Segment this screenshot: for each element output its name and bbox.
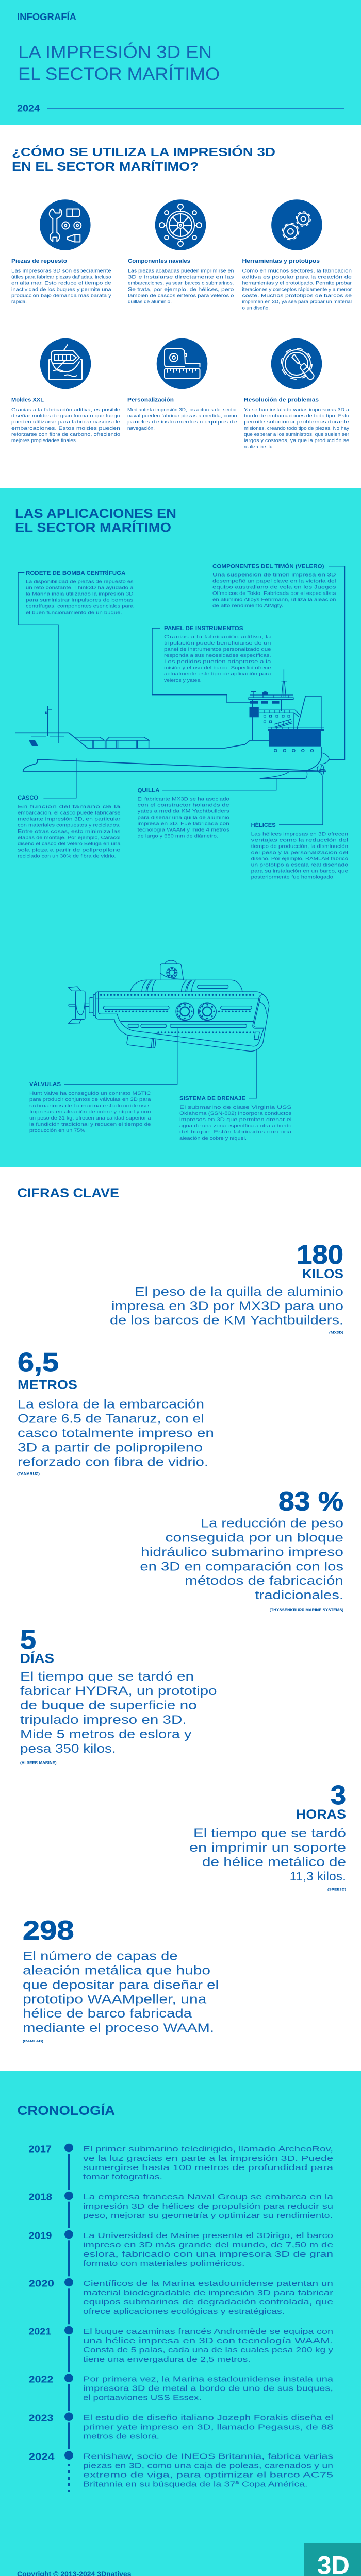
timeline entry 2020: equipos submarinos de degradación controlada, que <box>83 2298 333 2307</box>
callout: hull: CASCO <box>18 795 38 801</box>
text: XXL moulds: embarcaciones. Estos moldes pueden <box>11 426 120 431</box>
callout: keel: tecnología WAAM y mide 4 metros <box>137 827 229 833</box>
text: customisation <box>127 397 237 431</box>
stat: 6,5 metros: Ozare 6.5 de Tanaruz, con el <box>18 1412 204 1426</box>
callout: keel: impresa en 3D. Fue fabricada con <box>137 821 229 827</box>
text: spare parts: rápida. <box>11 299 27 304</box>
callout: keel: QUILLA <box>137 788 160 794</box>
callout: hull: En función del tamaño de la <box>18 804 121 809</box>
stat: 3 horas: HORAS <box>296 1807 346 1822</box>
stat: 5 días: Mide 5 metros de eslora y <box>20 1727 191 1741</box>
panel: timeline <box>0 2071 361 2576</box>
header kicker: INFOGRAFÍA <box>17 11 76 22</box>
stat: 6,5 metros: 6,5 <box>18 1348 59 1378</box>
panel: maritime applications <box>0 488 361 1167</box>
stat: 3 horas: de hélice metálico de <box>202 1855 346 1869</box>
text: customisation: Mediante la impresión 3D, los actores del sector <box>127 407 237 413</box>
callout: impeller: un reto constante. Think3D ha ayudado a <box>26 585 134 591</box>
stat: 83 %: hidráulico submarino impreso <box>141 1545 343 1559</box>
stat: 6,5 metros: casco totalmente impreso en <box>18 1427 214 1440</box>
callout: propellers: tiempo de producción, la disminución <box>251 843 348 849</box>
stat: 180 kilos: KILOS <box>302 1267 343 1281</box>
stat: 298 layers: aleación metálica que hubo <box>23 1963 210 1977</box>
text: naval components: 3D e instalarse directamente en las <box>128 274 234 280</box>
timeline entry 2019: 2019 <box>29 2231 52 2241</box>
text: problem solving: bordo de embarcaciones de todo tipo. Esto <box>244 413 349 419</box>
timeline entry 2021 <box>29 2326 334 2372</box>
callout: instrument panel: panel de instrumentos personalizado que <box>164 647 271 652</box>
text: problem solving <box>244 397 350 450</box>
callout: propellers <box>251 776 348 880</box>
text: XXL moulds <box>11 397 120 444</box>
callout: valves: un peso de 31 kg, ofrecen una calidad superior a <box>29 1115 151 1121</box>
section heading: CRONOLOGÍA <box>18 2103 115 2118</box>
callout: instrument panel: responda a sus necesidades específicas. <box>164 653 271 658</box>
stat: 298 layers: El número de capas de <box>23 1949 178 1963</box>
text: problem solving: que esperar a los suministros, que suelen ser <box>244 432 349 437</box>
text: tools and prototypes: imprimen en 3D, ya sea para probar un material <box>242 299 352 304</box>
timeline entry 2017: 2017 <box>29 2144 52 2155</box>
timeline entry 2018: La empresa francesa Naval Group se embarca en la <box>83 2193 334 2201</box>
text: naval components: embarcaciones, ya sean barcos o submarinos. <box>128 280 234 286</box>
callout: keel: de largo y 650 mm de diámetro. <box>137 834 218 839</box>
text: customisation: paneles de instrumentos o equipos de <box>127 419 237 425</box>
callout: propellers: un prototipo a escala real diseñado <box>251 862 348 868</box>
section heading <box>12 145 275 173</box>
callout: rudder components: Olímpicos de Tokio. Fabricada por el especialista <box>212 590 336 596</box>
callout: instrument panel: Gracias a la fabricación aditiva, la <box>164 634 272 640</box>
stat: 5 días: 5 <box>20 1625 36 1655</box>
stat: 5 días <box>20 1625 217 1765</box>
callout: propellers: ventajas como la reducción del <box>251 837 348 843</box>
timeline entry 2024 <box>29 2451 333 2492</box>
callout: keel: para diseñar una quilla de aluminio <box>137 815 229 821</box>
section heading: LAS APLICACIONES EN <box>15 506 176 521</box>
icon: spare parts tools <box>40 199 91 250</box>
timeline entry 2018: impresión 3D de hélices de propulsión para reducir su <box>83 2202 333 2211</box>
callout: instrument panel: actualmente este tipo de aplicación para <box>164 671 271 677</box>
year: 2024 <box>17 104 40 114</box>
stat: 5 días: pesa 350 kilos. <box>20 1742 116 1756</box>
callout: propellers: diseño. Por ejemplo, RAMLAB fabricó <box>251 856 348 861</box>
main title <box>18 43 220 84</box>
main title: EL SECTOR MARÍTIMO <box>18 64 220 84</box>
callout: drainage system: El submarino de clase Virginia USS <box>179 1105 292 1110</box>
callout: valves: Hunt Valve ha conseguido un contrato MSTIC <box>29 1091 151 1096</box>
callout: hull: etapas de montaje. Por ejemplo, Caracol <box>18 835 121 840</box>
text: problem solving: largos y costosos, ya que la producción se <box>244 438 349 444</box>
timeline entry 2017: sumergirse hasta 100 metros de profundidad para <box>83 2163 334 2172</box>
callout: instrument panel: veleros y yates. <box>164 677 202 683</box>
timeline entry 2024: Renishaw, socio de INEOS Britannia, fabrica varias <box>83 2452 333 2461</box>
timeline entry 2021: Consta de 5 palas, cada una de las cuales pesa 200 kg y <box>83 2346 334 2354</box>
stat: 298 layers: hélice de barco fabricada <box>23 2007 192 2021</box>
stat: 5 días: DÍAS <box>20 1651 54 1666</box>
icon: gears <box>271 199 322 250</box>
stat: 83 %: métodos de fabricación <box>185 1574 343 1588</box>
callout: hull: mediante impresión 3D, en particular <box>18 816 121 822</box>
section heading <box>15 506 176 535</box>
text: tools and prototypes: Como en muchos sectores, la fabricación <box>242 268 352 274</box>
stat: 180 kilos <box>110 1240 343 1334</box>
callout: propellers: Las hélices impresas en 3D ofrecen <box>251 831 348 837</box>
text: problem solving: misiones, creando todo tipo de piezas. No hay <box>244 426 349 431</box>
callout: drainage system: del buque. Están fabricados con una <box>179 1129 292 1135</box>
callout: impeller: la Marina india utilizando la impresión 3D <box>26 591 134 597</box>
stat: 180 kilos: de los barcos de KM Yachtbuilders. <box>110 1314 343 1328</box>
stat: 3 horas <box>189 1781 346 1892</box>
timeline entry 2018 <box>29 2192 334 2228</box>
text: problem solving: Resolución de problemas <box>244 397 319 403</box>
text: problem solving: permite solucionar problemas durante <box>244 419 349 425</box>
callout: keel: El fabricante MX3D se ha asociado <box>137 796 229 802</box>
timeline entry 2020: material biodegradable de impresión 3D para fabricar <box>83 2289 333 2297</box>
timeline entry 2023: 2023 <box>29 2413 54 2423</box>
timeline entry 2020: Científicos de la Marina estadounidense patentan un <box>83 2279 333 2288</box>
stat: 298 layers <box>23 1916 219 2043</box>
text: XXL moulds: Moldes XXL <box>11 397 44 403</box>
stat: 6,5 metros: reforzado con fibra de vidrio. <box>18 1455 208 1469</box>
stat: 6,5 metros: La eslora de la embarcación <box>18 1398 204 1412</box>
callout: instrument panel: Los pedidos pueden adaptarse a la <box>164 659 271 665</box>
timeline entry 2021: tiene una envergadura de 2,5 metros. <box>83 2355 251 2364</box>
icon: gear and screwdriver <box>271 338 322 389</box>
stat: 83 %: tradicionales. <box>255 1588 343 1602</box>
timeline entry 2024: 2024 <box>29 2451 55 2462</box>
callout: drainage system: aleación de cobre y níquel. <box>179 1136 247 1141</box>
stat: 83 %: 83 % <box>278 1487 343 1517</box>
stat: 5 días: tripulado impreso en 3D. <box>20 1713 187 1727</box>
timeline entry 2018: 2018 <box>29 2192 52 2202</box>
section heading: ¿CÓMO SE UTILIZA LA IMPRESIÓN 3D <box>12 145 275 159</box>
text: tools and prototypes: herramientas y el prototipado. Permite probar <box>242 280 352 286</box>
stat: 298 layers: 298 <box>23 1916 74 1945</box>
timeline entry 2020: ofrece aplicaciones ecológicas y estratégicas. <box>83 2307 285 2316</box>
callout: impeller: La disponibilidad de piezas de repuesto es <box>26 579 134 585</box>
timeline entry 2024: extremo de viga, para optimizar el barco AC75 <box>83 2470 333 2479</box>
callout: drainage system: impresos en 3D que permiten drenar el <box>179 1117 292 1123</box>
callout: valves: la fundición tradicional y reducen el tiempo de <box>29 1122 151 1127</box>
timeline entry 2022: el portaaviones USS Essex. <box>83 2393 202 2402</box>
stat: 3 horas: El tiempo que se tardó <box>193 1826 346 1840</box>
icon: boat mould blueprint <box>40 338 91 389</box>
callout: valves: Impresas en aleación de cobre y níquel y con <box>29 1109 151 1115</box>
text: tools and prototypes: coste. Muchos prototipos de barcos se <box>242 293 352 298</box>
callout: drainage system: agua de una zona específica a otra a bordo <box>179 1123 292 1129</box>
stat: 3 horas: en imprimir un soporte <box>189 1841 346 1855</box>
callout: propellers: del peso y la personalización del <box>251 850 348 855</box>
text: customisation: navegación. <box>127 426 155 431</box>
callout: propellers: posteriormente fue homologado. <box>251 874 335 880</box>
callout: keel: yates a medida KM Yachtbuilders <box>137 809 229 815</box>
timeline entry 2018: peso, mejorar su geometría y optimizar su rendimiento. <box>83 2211 333 2220</box>
stat: 298 layers: prototipo WAAMpeller, una <box>23 1993 207 2006</box>
text: XXL moulds: diseñar moldes de gran formato que luego <box>11 413 120 419</box>
timeline entry 2023: metros de eslora. <box>83 2432 159 2441</box>
callout: valves: submarinos de la marina estadounidense. <box>29 1103 151 1109</box>
callout: keel <box>137 778 276 839</box>
text: naval components: también de cascos enteros para veleros o <box>128 293 234 298</box>
panel: key figures <box>0 1167 361 2071</box>
stat: 180 kilos: (MX3D) <box>329 1331 343 1334</box>
text: tools and prototypes: iteraciones y conceptos rápidamente y a menor <box>242 286 352 292</box>
text: spare parts: producción bajo demanda más barata y <box>11 293 111 298</box>
timeline entry 2021: El buque cazaminas francés Andromède se equipa con <box>83 2327 333 2336</box>
callout: impeller: para suministrar impulsores de bombas <box>26 598 134 603</box>
callout: rudder components: de alto rendimiento AlMgty. <box>212 603 283 608</box>
callout: hull: embarcación, el casco puede fabricarse <box>18 810 121 816</box>
stat: 83 %: conseguida por un bloque <box>165 1531 343 1545</box>
callout: drainage system: SISTEMA DE DRENAJE <box>179 1095 245 1101</box>
stat: 5 días: El tiempo que se tardó en <box>20 1670 194 1684</box>
text: spare parts: en alta mar. Esto reduce el tiempo de <box>11 280 111 286</box>
panel: header <box>0 0 361 125</box>
text: spare parts: Las impresoras 3D son especialmente <box>11 268 111 274</box>
callout: rudder components: desempeñó un papel clave en la victoria del <box>212 578 336 584</box>
stat: 83 %: en 3D en comparación con los <box>140 1560 343 1573</box>
stat: 180 kilos: El peso de la quilla de aluminio <box>135 1285 343 1299</box>
timeline entry 2022: 2022 <box>29 2375 54 2385</box>
timeline entry 2023 <box>29 2412 333 2449</box>
callout: keel: con el constructor holandés de <box>137 803 229 808</box>
logo: 3Dnatives <box>304 2543 361 2576</box>
stat: 3 horas: (SPEE3D) <box>327 1889 346 1892</box>
timeline entry 2017: tomar fotografías. <box>83 2173 162 2181</box>
callout: rudder components: Una suspensión de timón impresa en 3D <box>212 572 336 578</box>
text: spare parts: Piezas de repuesto <box>11 258 67 264</box>
stat: 5 días: (AI SEER MARINE) <box>20 1762 57 1765</box>
text: spare parts: inactividad de los buques y permite una <box>11 286 111 292</box>
callout: propellers: HÉLICES <box>251 822 276 828</box>
callout: drainage system <box>179 1049 292 1141</box>
callout: instrument panel <box>152 625 272 703</box>
icon: ship helm <box>155 199 206 250</box>
timeline entry 2023: primer yate impreso en 3D, llamado Pegasus, de 88 <box>83 2422 333 2431</box>
timeline entry 2017: El primer submarino teledirigido, llamado ArcheoRov, <box>83 2145 333 2154</box>
timeline entry 2019: eslora, fabricado con una impresora 3D de gran <box>83 2250 333 2259</box>
stat: 83 % <box>140 1487 343 1612</box>
timeline entry 2022 <box>29 2374 334 2411</box>
main title: LA IMPRESIÓN 3D EN <box>18 43 212 62</box>
callout: instrument panel: tripulación puede beneficiarse de un <box>164 640 271 646</box>
text: naval components: quillas de aluminio. <box>128 299 172 304</box>
stat: 5 días: fabricar HYDRA, un prototipo <box>20 1684 217 1698</box>
section heading: EL SECTOR MARÍTIMO <box>15 520 171 535</box>
text: customisation: naval pueden fabricar piezas a medida, como <box>127 413 237 419</box>
callout: hull: sola pieza a partir de polipropileno <box>18 847 121 853</box>
timeline entry 2023: El estudio de diseño italiano Jozeph Forakis diseña el <box>83 2413 333 2422</box>
timeline entry 2021: 2021 <box>29 2327 51 2337</box>
callout: impeller <box>18 570 134 743</box>
stat: 6,5 metros: (TANARUZ) <box>17 1473 40 1476</box>
text: problem solving: realiza in situ. <box>244 444 274 450</box>
stat: 6,5 metros <box>17 1348 214 1476</box>
callout: valves <box>29 1028 177 1133</box>
text: XXL moulds: mejores propiedades finales. <box>11 438 77 444</box>
text: tools and prototypes: aditiva es popular para la creación de <box>242 274 352 280</box>
timeline entry 2022: Por primera vez, la Marina estadounidense instala una <box>83 2375 334 2383</box>
callout: hull: Entre otras cosas, esto minimiza las <box>18 828 121 834</box>
timeline entry 2017 <box>29 2144 334 2190</box>
timeline entry 2017: ve la luz gracias en parte a la impresión 3D. Puede <box>83 2154 333 2163</box>
callout: propellers: para su instalación en un barco, que <box>251 868 348 874</box>
callout: hull: reciclado con un 30% de fibra de vidrio. <box>18 853 116 859</box>
stat: 180 kilos: 180 <box>297 1240 343 1270</box>
callout: hull <box>18 758 121 859</box>
stat: 298 layers: mediante el proceso WAAM. <box>23 2021 214 2035</box>
callout: rudder components: equipo australiano de vela en los Juegos <box>212 584 336 590</box>
stat: 298 layers: (RAMLAB) <box>23 2040 43 2043</box>
callout: instrument panel: PANEL DE INSTRUMENTOS <box>164 625 243 632</box>
stat: 5 días: de buque de superficie no <box>20 1699 197 1713</box>
timeline entry 2019 <box>29 2230 333 2276</box>
timeline entry 2024: Britannia en su búsqueda de la 37ª Copa América. <box>83 2480 307 2488</box>
callout: rudder components: en aluminio Alloys Fehrmann, utiliza la aleación <box>212 597 336 602</box>
section heading: CIFRAS CLAVE <box>18 1186 119 1200</box>
text: problem solving: Ya se han instalado varias impresoras 3D a <box>244 407 350 413</box>
text: tools and prototypes <box>242 258 352 311</box>
callout: rudder components: COMPONENTES DEL TIMÓN (VELERO) <box>212 563 324 570</box>
callout: drainage system: Oklahoma (SSN-802) incorpora conductos <box>179 1111 292 1116</box>
text: XXL moulds: reforzarse con fibra de carbono, ofreciendo <box>11 432 120 437</box>
text: spare parts <box>11 258 111 304</box>
text: naval components <box>128 258 234 304</box>
timeline entry 2024: piezas en 3D, como una caja de poleas, carenados y un <box>83 2461 333 2470</box>
text: tools and prototypes: Herramientas y prototipos <box>242 258 320 264</box>
text: tools and prototypes: o un diseño. <box>242 305 270 311</box>
callout: valves: producción en un 75%. <box>29 1128 87 1133</box>
timeline entry 2019: impreso en 3D más grande del mundo, de 7,50 m de <box>83 2241 333 2249</box>
callout: rudder components <box>212 563 344 759</box>
icon: measuring tape and ruler <box>157 338 207 389</box>
text: XXL moulds: pueden utilizarse para fabricar cascos de <box>11 419 120 425</box>
text: naval components: Se trata, por ejemplo, de hélices, pero <box>128 286 234 292</box>
callout: impeller: centrífugas, componentes esenciales para <box>26 604 134 609</box>
panel: uses of 3D printing <box>0 125 361 488</box>
callout: valves: para producir conjuntos de válvulas en 3D para <box>29 1097 151 1103</box>
stat: 83 %: (THYSSENKRUPP MARINE SYSTEMS) <box>270 1609 343 1612</box>
timeline entry 2019: formato con materiales poliméricos. <box>83 2259 244 2268</box>
callout: valves: VÁLVULAS <box>29 1081 61 1088</box>
diagram: cargo ship <box>15 669 329 778</box>
text: naval components: Componentes navales <box>128 258 190 264</box>
stat: 83 %: La reducción de peso <box>201 1516 343 1530</box>
text: spare parts: útiles para fabricar piezas dañadas, incluso <box>11 274 111 280</box>
stat: 180 kilos: impresa en 3D por MX3D para uno <box>111 1299 343 1313</box>
text: customisation: Personalización <box>127 397 174 403</box>
stat: 6,5 metros: 3D a partir de polipropileno <box>18 1441 203 1455</box>
stat: 3 horas: 11,3 kilos. <box>290 1870 346 1884</box>
timeline entry 2019: La Universidad de Maine presenta el 3Dirigo, el barco <box>83 2231 333 2240</box>
diagram: submarine <box>69 960 269 1051</box>
text: XXL moulds: Gracias a la fabricación aditiva, es posible <box>11 407 120 413</box>
timeline entry 2020 <box>29 2278 333 2324</box>
timeline entry 2022: impresora 3D de metal a bordo de uno de sus buques, <box>83 2384 333 2393</box>
callout: hull: con materiales compuestos y reciclados. <box>18 822 121 828</box>
stat: 298 layers: que depositar para diseñar el <box>23 1978 219 1992</box>
section heading: EN EL SECTOR MARÍTIMO? <box>12 159 199 173</box>
timeline entry 2020: 2020 <box>29 2279 54 2289</box>
callout: impeller: el buen funcionamiento de un buque. <box>26 610 122 616</box>
stat: 6,5 metros: METROS <box>18 1378 77 1393</box>
callout: instrument panel: misión y el uso del barco. Superfici ofrece <box>164 665 271 671</box>
callout: hull: diseñó el casco del velero Beluga en una <box>18 841 121 846</box>
stat: 3 horas: 3 <box>331 1781 346 1810</box>
callout: impeller: RODETE DE BOMBA CENTRÍFUGA <box>26 570 126 577</box>
text: naval components: Las piezas acabadas pueden imprimirse en <box>128 268 234 274</box>
timeline entry 2021: una hélice impresa en 3D con tecnología WAAM. <box>83 2336 333 2345</box>
